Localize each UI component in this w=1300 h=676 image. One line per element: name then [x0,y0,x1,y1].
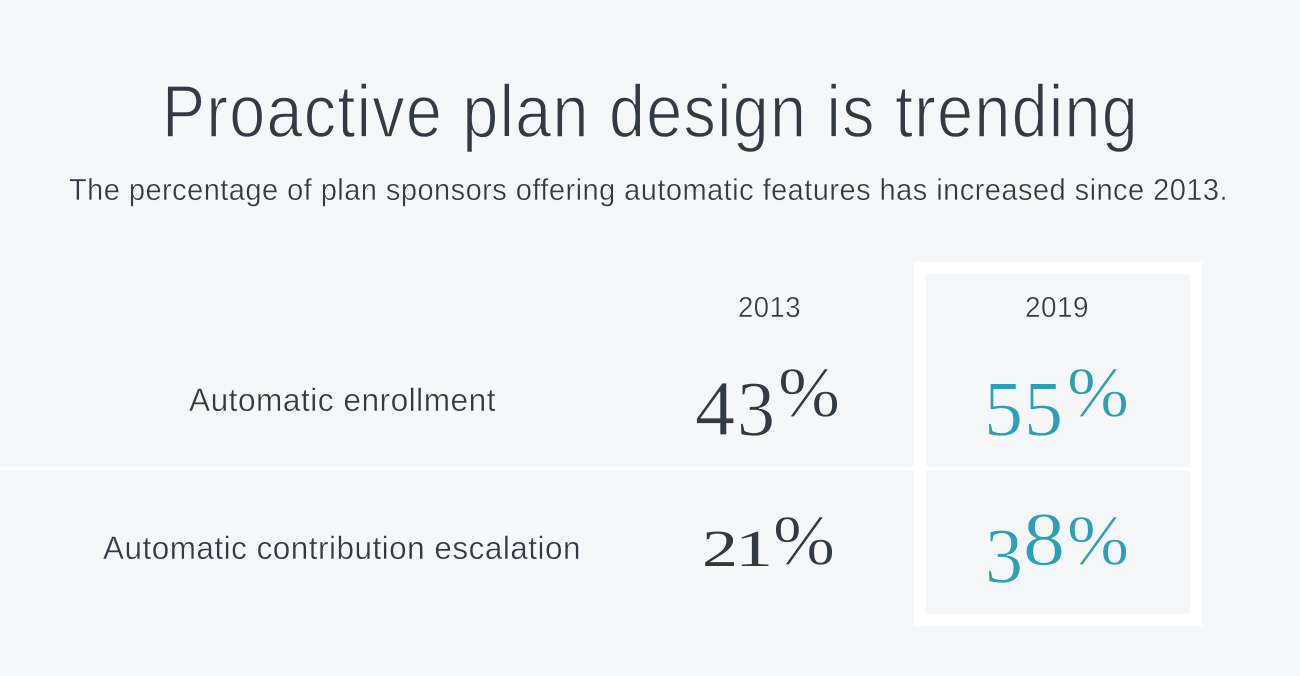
panel: 2019 highlight column [920,268,1196,620]
row label: automatic enrollment: Automatic enrollment [189,382,496,418]
row divider [0,467,1190,470]
value: escalation 2019 38%: % [1067,502,1129,580]
value: escalation 2019 38%: 8 [1023,498,1065,582]
value: enrollment 2013 43%: % [778,354,840,432]
row label: automatic contribution escalation: Automatic contribution escalation [103,530,581,566]
value: escalation 2019 38% [985,498,1129,599]
subtitle: The percentage of plan sponsors offering automatic features has increased since 2013. [69,172,1228,207]
value: enrollment 2013 43% [695,354,840,452]
value: escalation 2013 21%: 2 [702,521,738,578]
value: escalation 2013 21%: % [773,502,835,580]
value: enrollment 2019 55%: 5 [1024,365,1063,452]
column heading: 2019: 2019 [1025,292,1089,324]
value: enrollment 2019 55% [984,354,1129,452]
value: enrollment 2013 43%: 3 [737,365,775,452]
title: Proactive plan design is trending [162,70,1139,153]
value: enrollment 2019 55%: 5 [984,365,1023,452]
value: escalation 2013 21%: 1 [735,521,773,578]
column heading: 2013: 2013 [738,292,801,324]
value: enrollment 2019 55%: % [1067,354,1129,432]
value: escalation 2013 21% [702,502,835,580]
value: escalation 2019 38%: 3 [985,512,1023,599]
value: enrollment 2013 43%: 4 [695,365,735,452]
